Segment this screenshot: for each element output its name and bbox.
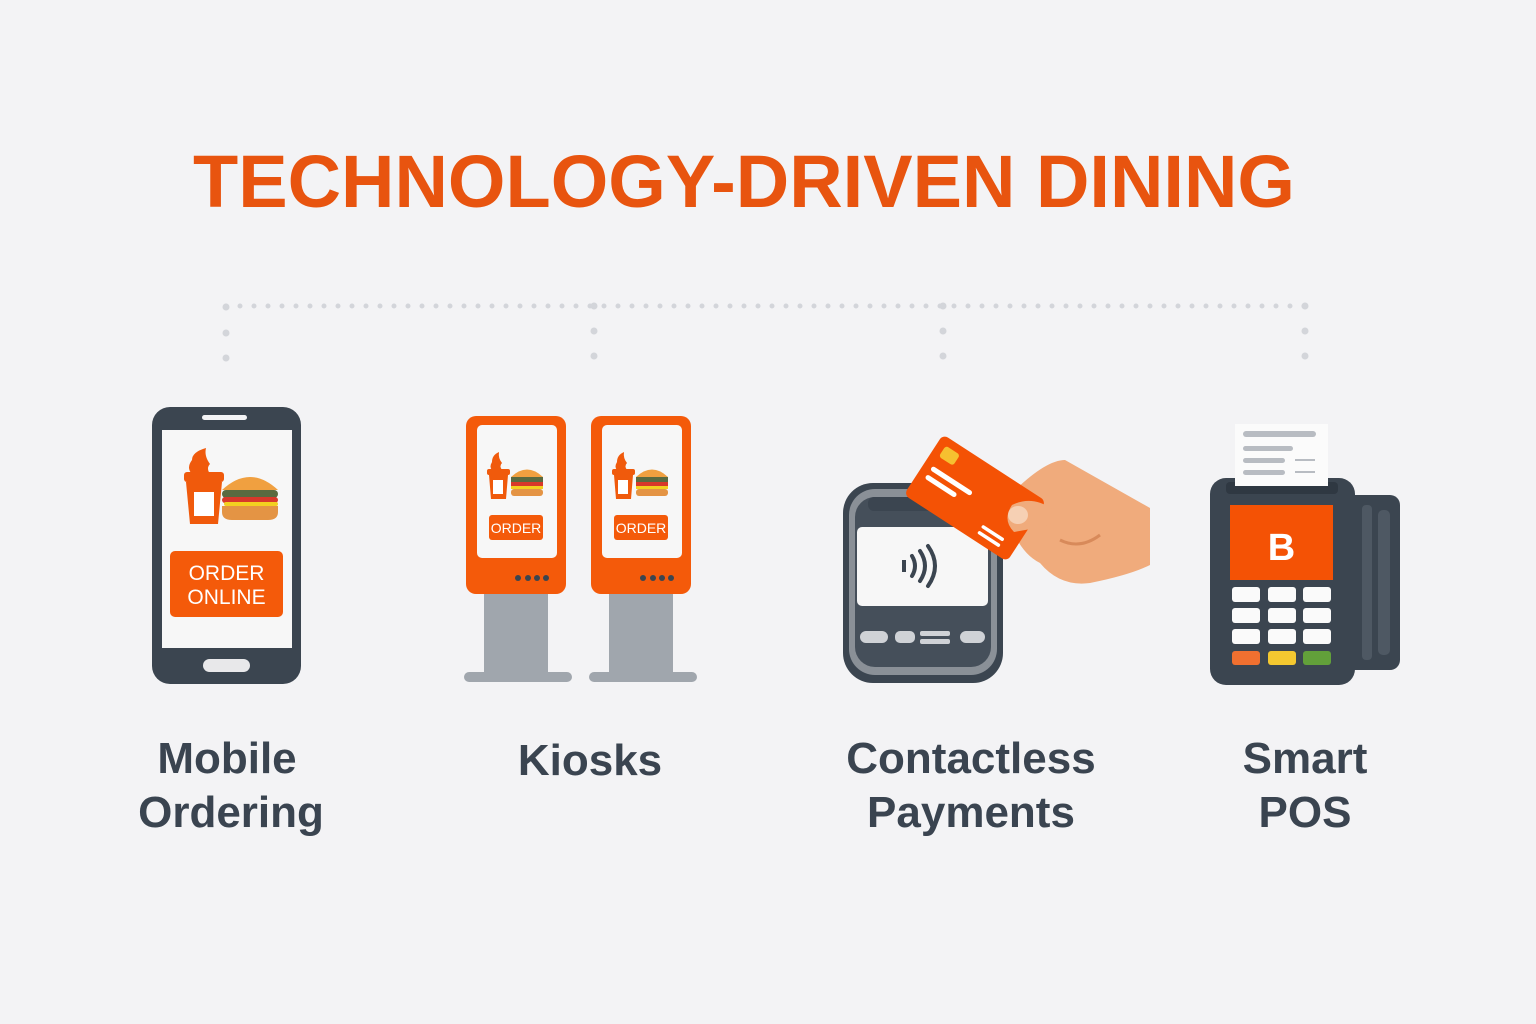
connector: dotted line [222, 302, 1308, 362]
label: smart pos [1243, 734, 1368, 837]
label: contactless payments: Payments [867, 788, 1075, 837]
label: smart pos: POS [1259, 788, 1351, 837]
icon: hand with card [904, 434, 1150, 584]
icon: contactless terminal [843, 434, 1150, 683]
button: order online [170, 551, 283, 617]
icon: kiosk 1: ORDER [491, 520, 541, 536]
icon: smart POS [1210, 424, 1400, 685]
label: mobile ordering [138, 734, 324, 837]
icon: kiosk 2 [589, 416, 697, 682]
icon: kiosk 2: ORDER [616, 520, 666, 536]
button: order online: ONLINE [187, 586, 266, 609]
icon: smartphone [152, 407, 301, 684]
label: smart pos: Smart [1243, 734, 1368, 783]
button: order online: ORDER [189, 562, 264, 585]
label: mobile ordering: Ordering [138, 788, 324, 837]
label: mobile ordering: Mobile [157, 734, 297, 783]
receipt [1235, 424, 1328, 486]
icon: kiosk 1 [464, 416, 572, 682]
title: TECHNOLOGY-DRIVEN DINING [193, 140, 1295, 223]
label: contactless payments: Contactless [846, 734, 1096, 783]
icon: smart POS: B [1268, 527, 1295, 569]
label: kiosks: Kiosks [518, 736, 662, 785]
label: contactless payments [846, 734, 1096, 837]
icon: cup and burger [184, 448, 278, 524]
